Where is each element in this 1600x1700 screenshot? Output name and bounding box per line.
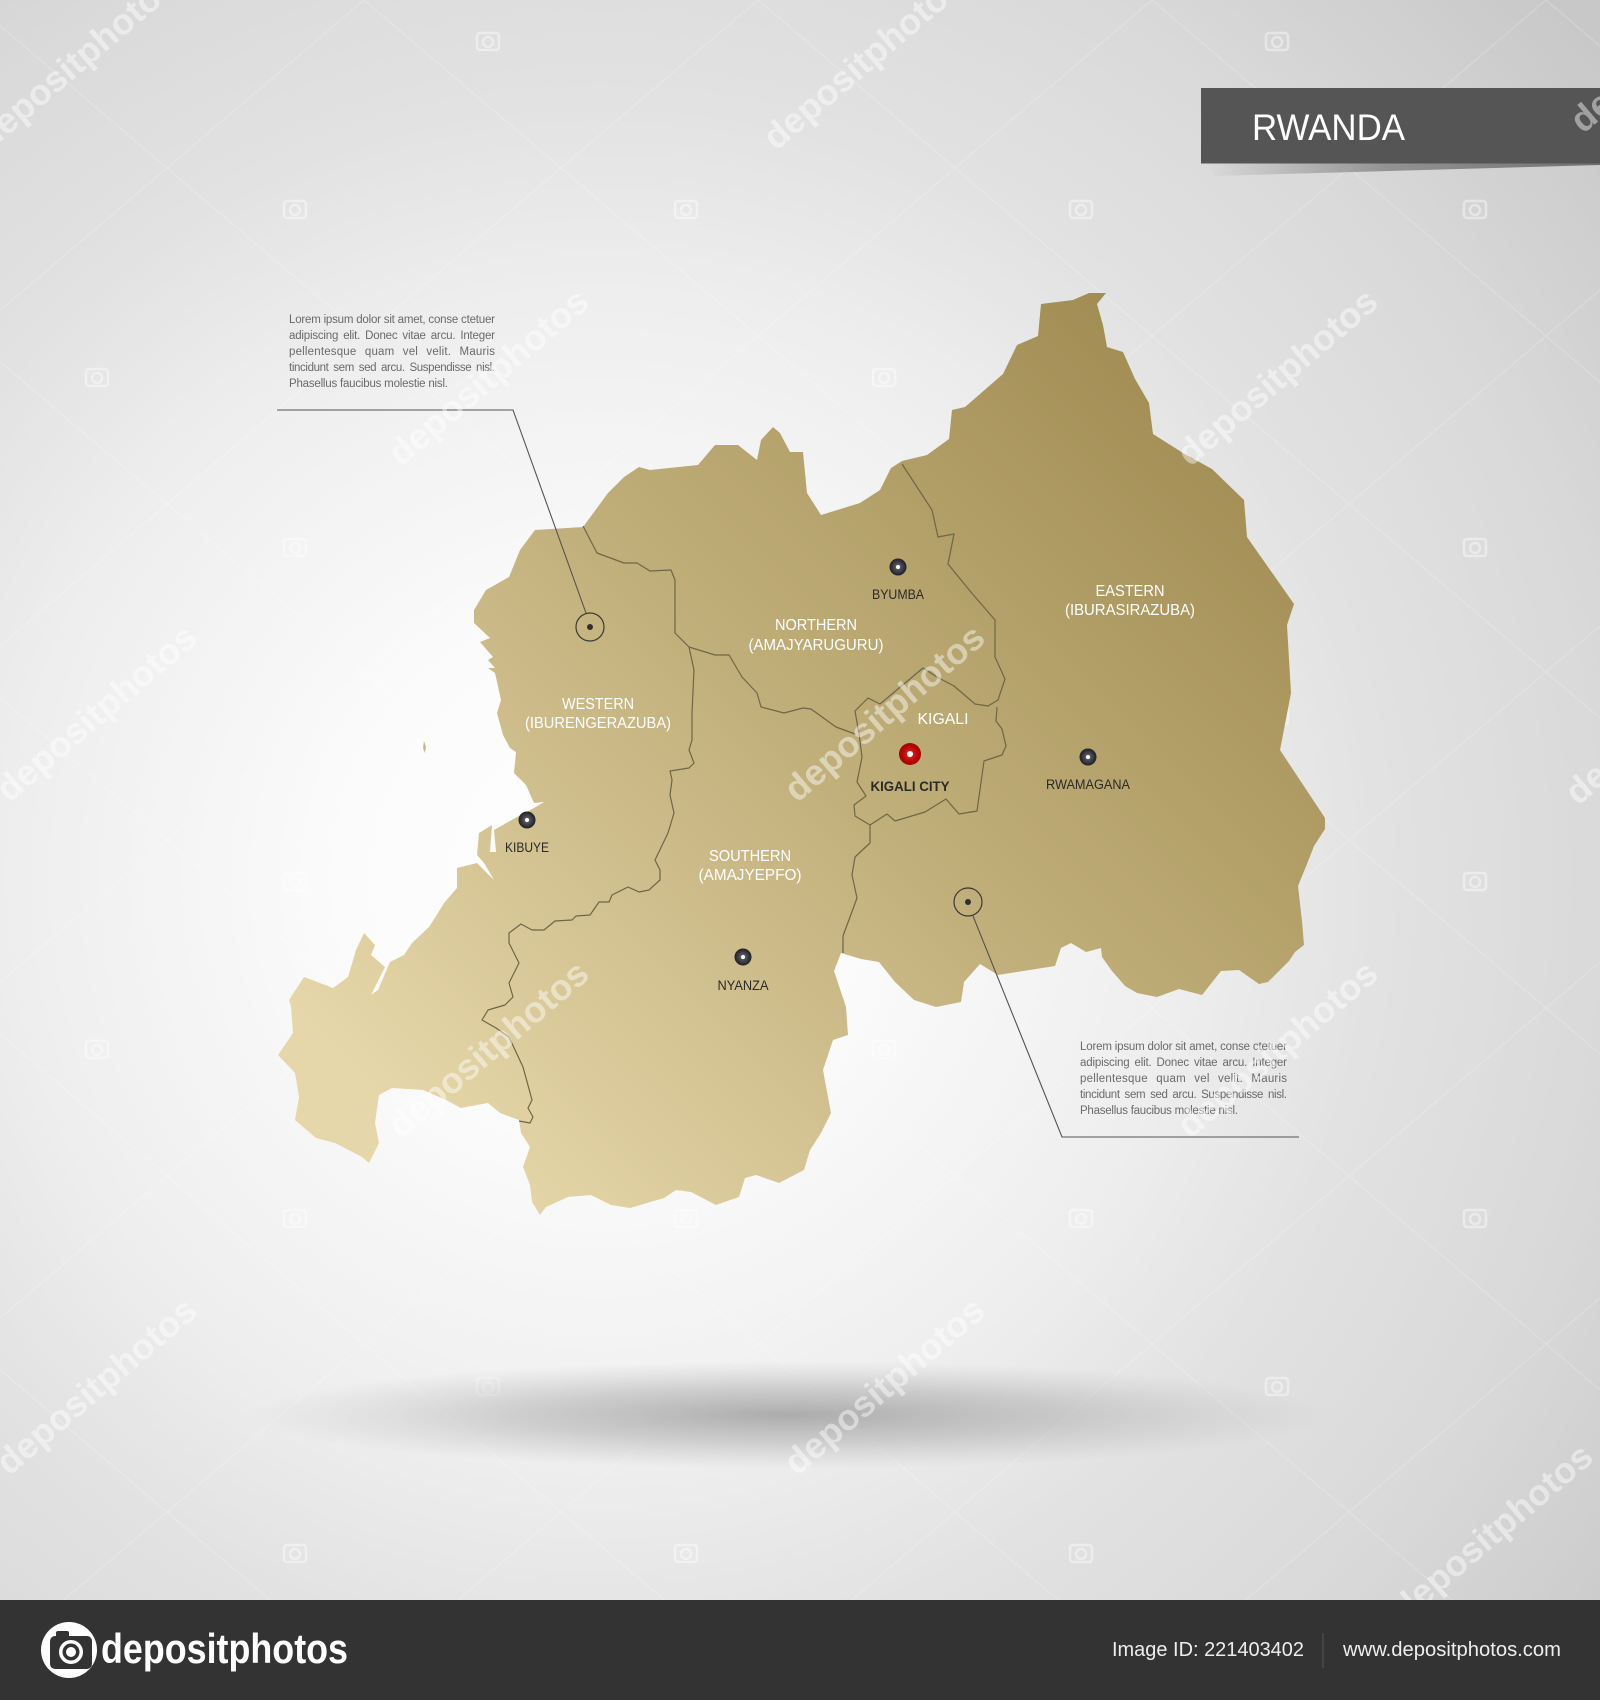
callout text (1080, 1041, 1287, 1117)
map of Rwanda (278, 293, 1325, 1215)
region label: Kigali: KIGALI (918, 711, 968, 728)
watermark text: depositphotos (1384, 1435, 1600, 1628)
border: southern and eastern (843, 825, 870, 953)
region label: Southern: (AMAJYEPFO) (698, 867, 802, 884)
watermark text: depositphotos (1169, 952, 1385, 1145)
callout: top left (277, 314, 604, 641)
callout leader line (277, 410, 586, 613)
region label: Northern: NORTHERN (775, 617, 857, 634)
region label: Eastern (1065, 583, 1195, 619)
callout text: adipiscing elit. Donec vitae arcu. Integer (1080, 1057, 1287, 1069)
region label: Eastern: EASTERN (1096, 583, 1164, 600)
city marker: Kibuye (505, 812, 549, 855)
callout text: Lorem ipsum dolor sit amet, conse ctetuer (289, 314, 495, 326)
city marker: Kibuye: KIBUYE (505, 840, 549, 855)
map landmass (278, 293, 1325, 1215)
callout text: tincidunt sem sed arcu. Suspendisse nisl. (289, 362, 495, 374)
city marker: Nyanza (718, 948, 768, 993)
region label: Northern (748, 617, 884, 654)
watermark text: depositphotos (776, 616, 992, 809)
map island (423, 741, 426, 753)
callout target (576, 613, 604, 641)
callout text: tincidunt sem sed arcu. Suspendisse nisl. (1080, 1089, 1287, 1101)
region label: Southern: SOUTHERN (709, 848, 791, 865)
title band: RWANDA (1252, 107, 1405, 148)
region label: Southern (698, 848, 802, 884)
image id: Image ID: 221403402 (1112, 1639, 1304, 1661)
capital marker: Kigali City: KIGALI CITY (870, 778, 950, 794)
watermark text: depositphotos (1169, 280, 1385, 473)
callout text: pellentesque quam vel velit. Mauris (289, 346, 495, 358)
border: northern and southern (689, 647, 855, 734)
floor shadow under map (250, 1361, 1330, 1469)
capital marker: Kigali City (870, 743, 950, 794)
footer bar (0, 1600, 1600, 1700)
callout text: Phasellus faucibus molestie nisl. (289, 378, 448, 390)
watermark text: depositphotos (380, 952, 596, 1145)
callout text: pellentesque quam vel velit. Mauris (1080, 1073, 1287, 1085)
callout: bottom right (954, 888, 1299, 1137)
callout target (954, 888, 982, 916)
callout text: adipiscing elit. Donec vitae arcu. Integer (289, 330, 495, 342)
watermark text: depositphotos (380, 280, 596, 473)
watermark text: depositphotos (776, 1289, 992, 1482)
region label: Eastern: (IBURASIRAZUBA) (1065, 602, 1195, 619)
icon: camera logo (41, 1622, 97, 1678)
city marker: Rwamagana (1046, 748, 1130, 792)
region label: Western (525, 696, 671, 732)
border: Kigali (854, 668, 1006, 825)
city marker: Rwamagana: RWAMAGANA (1046, 777, 1130, 792)
callout text: Phasellus faucibus molestie nisl. (1080, 1105, 1238, 1117)
callout leader line (973, 916, 1299, 1137)
callout text (289, 314, 495, 390)
region label: Western: (IBURENGERAZUBA) (525, 715, 671, 732)
border: western and northern (583, 526, 689, 647)
callout text: Lorem ipsum dolor sit amet, conse ctetuer (1080, 1041, 1287, 1053)
region label: Western: WESTERN (562, 696, 634, 713)
watermark camera icons (86, 33, 1486, 1562)
border: eastern and northern (902, 464, 1005, 706)
city marker: Byumba (872, 558, 924, 602)
title band (1201, 88, 1600, 176)
border: western and southern (482, 647, 694, 1123)
city marker: Byumba: BYUMBA (872, 587, 924, 602)
city marker: Nyanza: NYANZA (718, 978, 768, 993)
region label: Northern: (AMAJYARUGURU) (748, 637, 884, 654)
logo wordmark: depositphotos (101, 1625, 348, 1672)
website url: www.depositphotos.com (1342, 1639, 1561, 1661)
